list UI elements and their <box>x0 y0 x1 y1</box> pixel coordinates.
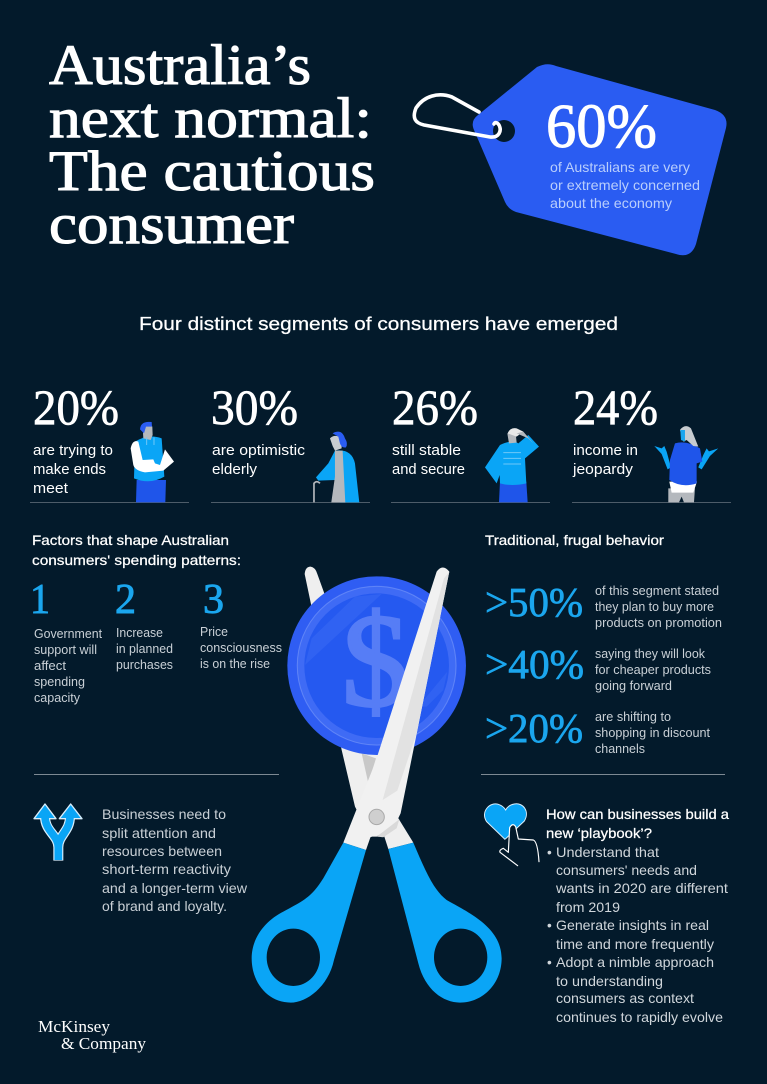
segment: 20%: meet <box>33 481 68 497</box>
tag caption: about the economy <box>550 196 672 211</box>
businesses note: short-term reactivity <box>102 862 231 877</box>
playbook block: consumers as context <box>556 991 694 1006</box>
stat: >40% <box>485 641 711 693</box>
factor 1: support will <box>34 643 97 657</box>
segment: 24%: income in <box>573 443 638 459</box>
playbook block: • <box>547 845 552 860</box>
factor 3: consciousness <box>200 641 282 655</box>
stat: >20%: >20% <box>485 705 583 751</box>
factor 1: capacity <box>34 691 81 705</box>
tag caption <box>550 160 700 211</box>
stat: >20%: are shifting to <box>595 710 671 724</box>
pivot screw <box>369 809 384 825</box>
title: consumer <box>49 193 294 256</box>
segment: 30% <box>211 379 370 503</box>
businesses note: split attention and <box>102 826 216 841</box>
businesses note <box>102 807 247 914</box>
stat: >20%: channels <box>595 742 645 756</box>
segment: 30%: 30% <box>211 379 298 435</box>
businesses note: Businesses need to <box>102 807 226 822</box>
factor 3: is on the rise <box>200 657 270 671</box>
playbook block: time and more frequently <box>556 937 714 952</box>
segment: 30%: elderly <box>212 462 258 478</box>
stat: >50%: >50% <box>485 579 583 625</box>
playbook block: new ‘playbook’? <box>546 825 652 841</box>
playbook block: • <box>547 918 552 933</box>
figure: elderly woman with cane <box>314 432 359 502</box>
factor 1: 1 <box>30 577 50 623</box>
businesses note: of brand and loyalty. <box>102 899 227 914</box>
logo: McKinsey & Company: & Company <box>61 1034 146 1053</box>
coin <box>287 576 466 755</box>
right handle <box>388 843 502 1003</box>
playbook block: wants in 2020 are different <box>555 881 728 896</box>
left handle <box>252 843 366 1003</box>
title: Australia’s <box>49 34 311 97</box>
playbook block: Adopt a nimble approach <box>556 955 714 970</box>
figure: woman shrugging <box>654 426 718 502</box>
logo: McKinsey & Company <box>38 1017 146 1053</box>
segment: 30%: are optimistic <box>212 443 305 459</box>
factors heading <box>32 532 241 568</box>
segment: 20% <box>30 379 189 503</box>
icon: split arrows <box>34 804 82 861</box>
icon: heart and pointing hand <box>484 804 539 866</box>
back scissor blade <box>305 567 413 849</box>
title: next normal: <box>49 87 372 150</box>
playbook block: How can businesses build a <box>546 806 729 822</box>
playbook block: to understanding <box>556 974 663 989</box>
factor 2 <box>115 577 173 672</box>
businesses note: and a longer-term view <box>102 881 247 896</box>
segment: 26% <box>391 379 550 503</box>
factor 2: in planned <box>116 642 173 656</box>
playbook block: • <box>547 955 552 970</box>
title: The cautious <box>49 140 375 203</box>
stat: >20% <box>485 705 711 756</box>
stat: >50%: of this segment stated <box>595 584 719 598</box>
segment: 24% <box>572 379 731 503</box>
playbook block: consumers' needs and <box>556 863 697 878</box>
factor 3 <box>200 577 282 671</box>
factor 3: Price <box>200 625 228 639</box>
segment: 24%: 24% <box>573 379 658 435</box>
segment: 26%: still stable <box>392 443 461 459</box>
factor 1 <box>30 577 103 705</box>
segment: 20%: 20% <box>33 379 119 435</box>
tag caption: or extremely concerned <box>550 178 700 193</box>
logo: McKinsey & Company: McKinsey <box>38 1017 111 1036</box>
title <box>49 34 375 256</box>
playbook block <box>546 806 729 1025</box>
segment: 26%: and secure <box>392 462 465 478</box>
front scissor blade <box>343 567 449 850</box>
figure: man scratching head <box>485 428 539 502</box>
stat: >20%: shopping in discount <box>595 726 711 740</box>
factors heading: consumers' spending patterns: <box>32 552 241 568</box>
tag caption: of Australians are very <box>550 160 690 175</box>
factor 2: purchases <box>116 658 173 672</box>
stat: >50%: products on promotion <box>595 616 722 630</box>
factor 1: spending <box>34 675 85 689</box>
tag string <box>414 95 500 137</box>
stat: >40%: going forward <box>595 679 672 693</box>
stat: >40%: >40% <box>485 641 584 687</box>
dollar sign: $ <box>342 586 409 734</box>
segment: 20%: make ends <box>33 462 106 478</box>
stat: >50%: they plan to buy more <box>595 600 714 614</box>
playbook block: continues to rapidly evolve <box>556 1010 723 1025</box>
price tag callout <box>414 64 727 255</box>
businesses note: resources between <box>102 844 222 859</box>
playbook block: from 2019 <box>556 900 620 915</box>
figure: man with crossed arms <box>131 422 174 502</box>
tag body <box>473 64 727 255</box>
factor 2: Increase <box>116 626 163 640</box>
scissors and coin illustration <box>252 567 502 1003</box>
playbook block: Generate insights in real <box>556 918 709 933</box>
segment: 20%: are trying to <box>33 443 113 459</box>
60% stat: 60% <box>546 93 657 161</box>
subheading: Four distinct segments of consumers have emerged <box>139 314 618 334</box>
segment: 26%: 26% <box>392 379 478 435</box>
frugal behaviour heading: Traditional, frugal behavior <box>485 532 664 548</box>
playbook block: Understand that <box>556 845 659 860</box>
segment: 24%: jeopardy <box>572 462 634 478</box>
stat: >40%: for cheaper products <box>595 663 711 677</box>
factor 1: Government <box>34 627 103 641</box>
factors heading: Factors that shape Australian <box>32 532 229 548</box>
factor 2: 2 <box>115 577 136 623</box>
stat: >50% <box>485 579 722 630</box>
factor 1: affect <box>34 659 67 673</box>
factor 3: 3 <box>203 577 224 623</box>
stat: >40%: saying they will look <box>595 647 706 661</box>
